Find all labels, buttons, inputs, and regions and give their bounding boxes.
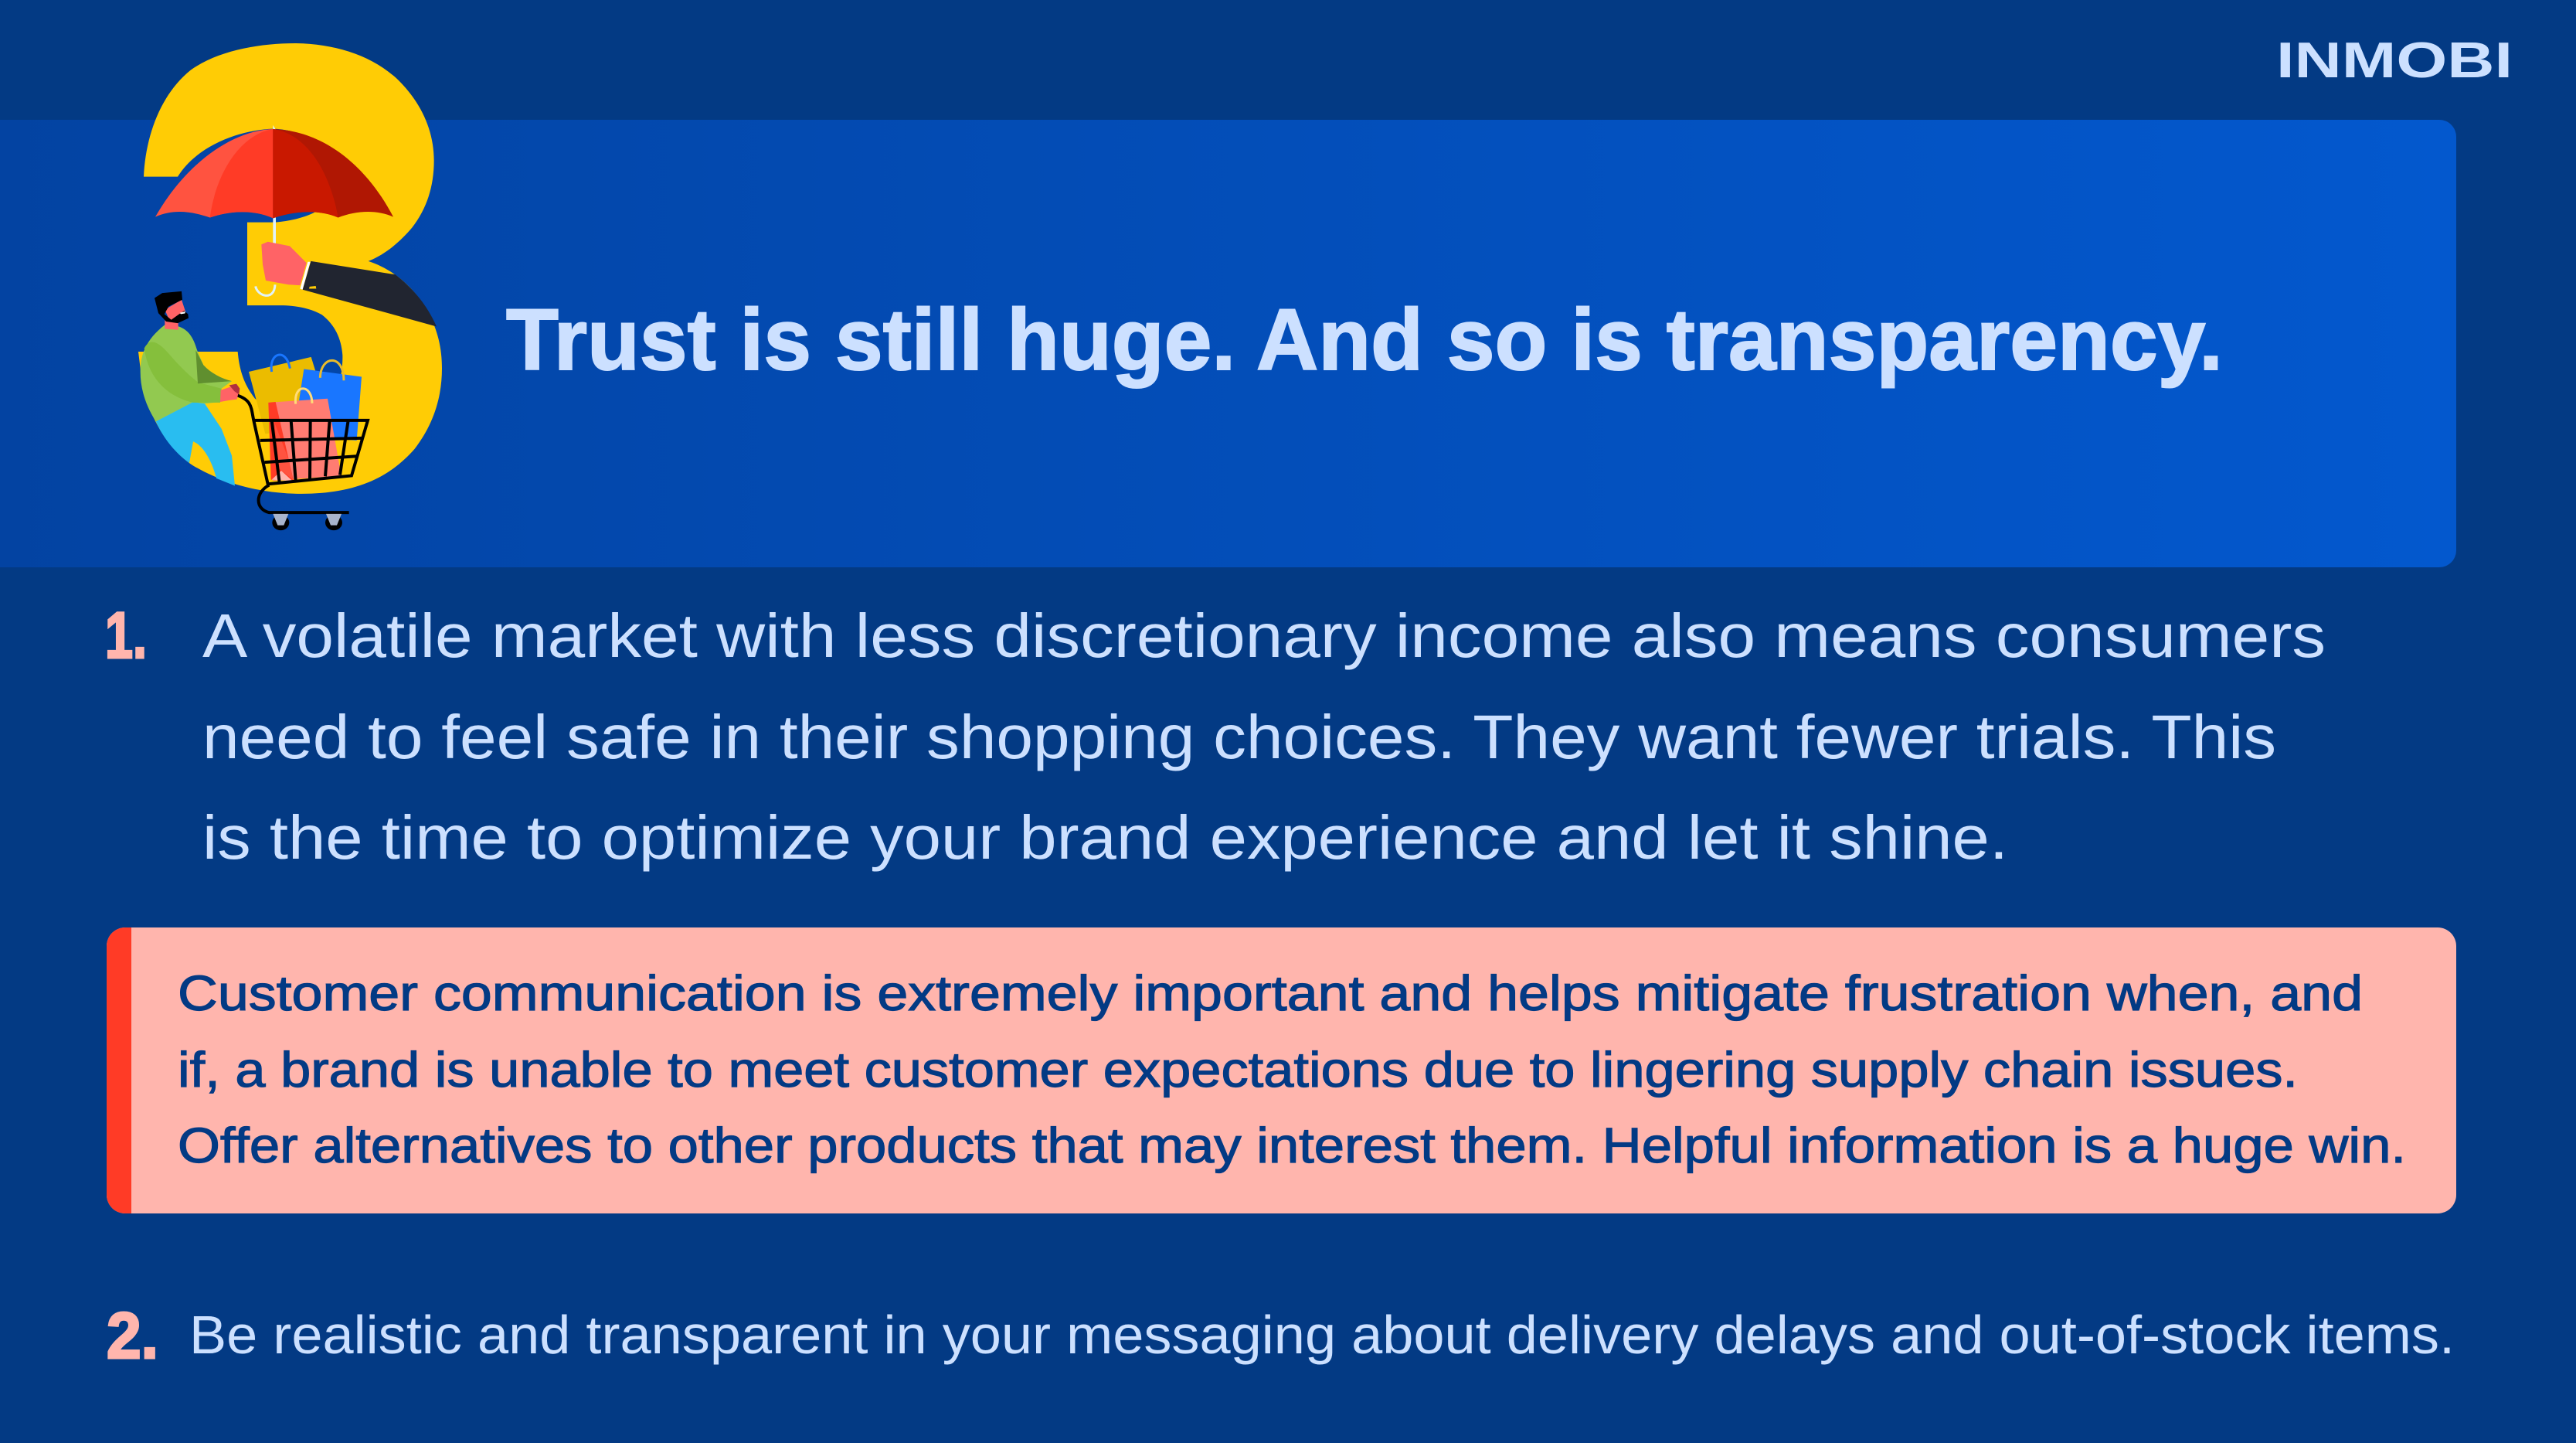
trousers: [156, 402, 235, 485]
callout text: if, a brand is unable to meet customer expectations due to lingering supply chain issues.: [178, 1042, 2298, 1098]
list item 1 text: A volatile market with less discretionary income also means consumers: [202, 601, 2326, 670]
cuff: [300, 262, 311, 290]
neck: [165, 320, 178, 330]
cart wheels: [272, 514, 342, 530]
blue bag: [294, 369, 362, 441]
callout text: [178, 965, 2406, 1173]
shopper: [141, 291, 240, 485]
sleeve: [303, 261, 437, 326]
list item 1 text: is the time to optimize your brand experience and let it shine.: [202, 803, 2008, 872]
callout accent bar: [107, 927, 131, 1213]
callout text: Customer communication is extremely important and helps mitigate frustration when, and: [178, 965, 2363, 1021]
shopping bags: [249, 355, 362, 481]
hair and beard: [155, 291, 189, 323]
logo: InMobi: INMOBI: [2276, 32, 2513, 88]
heading: Trust is still huge. And so is transparency.: [506, 291, 2223, 388]
list item 1 number: 1.: [105, 599, 147, 672]
illustration: number 3 with umbrella and shopper: [138, 43, 442, 530]
numeral 3: [138, 43, 442, 494]
shopping cart: [237, 395, 368, 512]
hand holding umbrella: [256, 218, 437, 326]
shopper hand: [220, 387, 238, 402]
sweater: [141, 325, 232, 421]
umbrella canopy: [155, 125, 393, 218]
callout text: Offer alternatives to other products that may interest them. Helpful information is a huge win.: [178, 1118, 2406, 1173]
umbrella shaft and handle: [273, 218, 276, 245]
callout background: [107, 927, 2456, 1213]
list item 2 text: Be realistic and transparent in your messaging about delivery delays and out-of-stock items.: [189, 1305, 2455, 1365]
hand: [261, 242, 307, 285]
list item 1 text: need to feel safe in their shopping choices. They want fewer trials. This: [202, 703, 2276, 771]
list item 2 number: 2.: [107, 1299, 158, 1372]
red bag: [268, 399, 342, 481]
panel: title banner: [0, 120, 2456, 567]
panel: callout: [107, 927, 2456, 1213]
face: [165, 300, 186, 322]
yellow bag: [249, 357, 332, 434]
list item 1 text: [202, 601, 2326, 872]
